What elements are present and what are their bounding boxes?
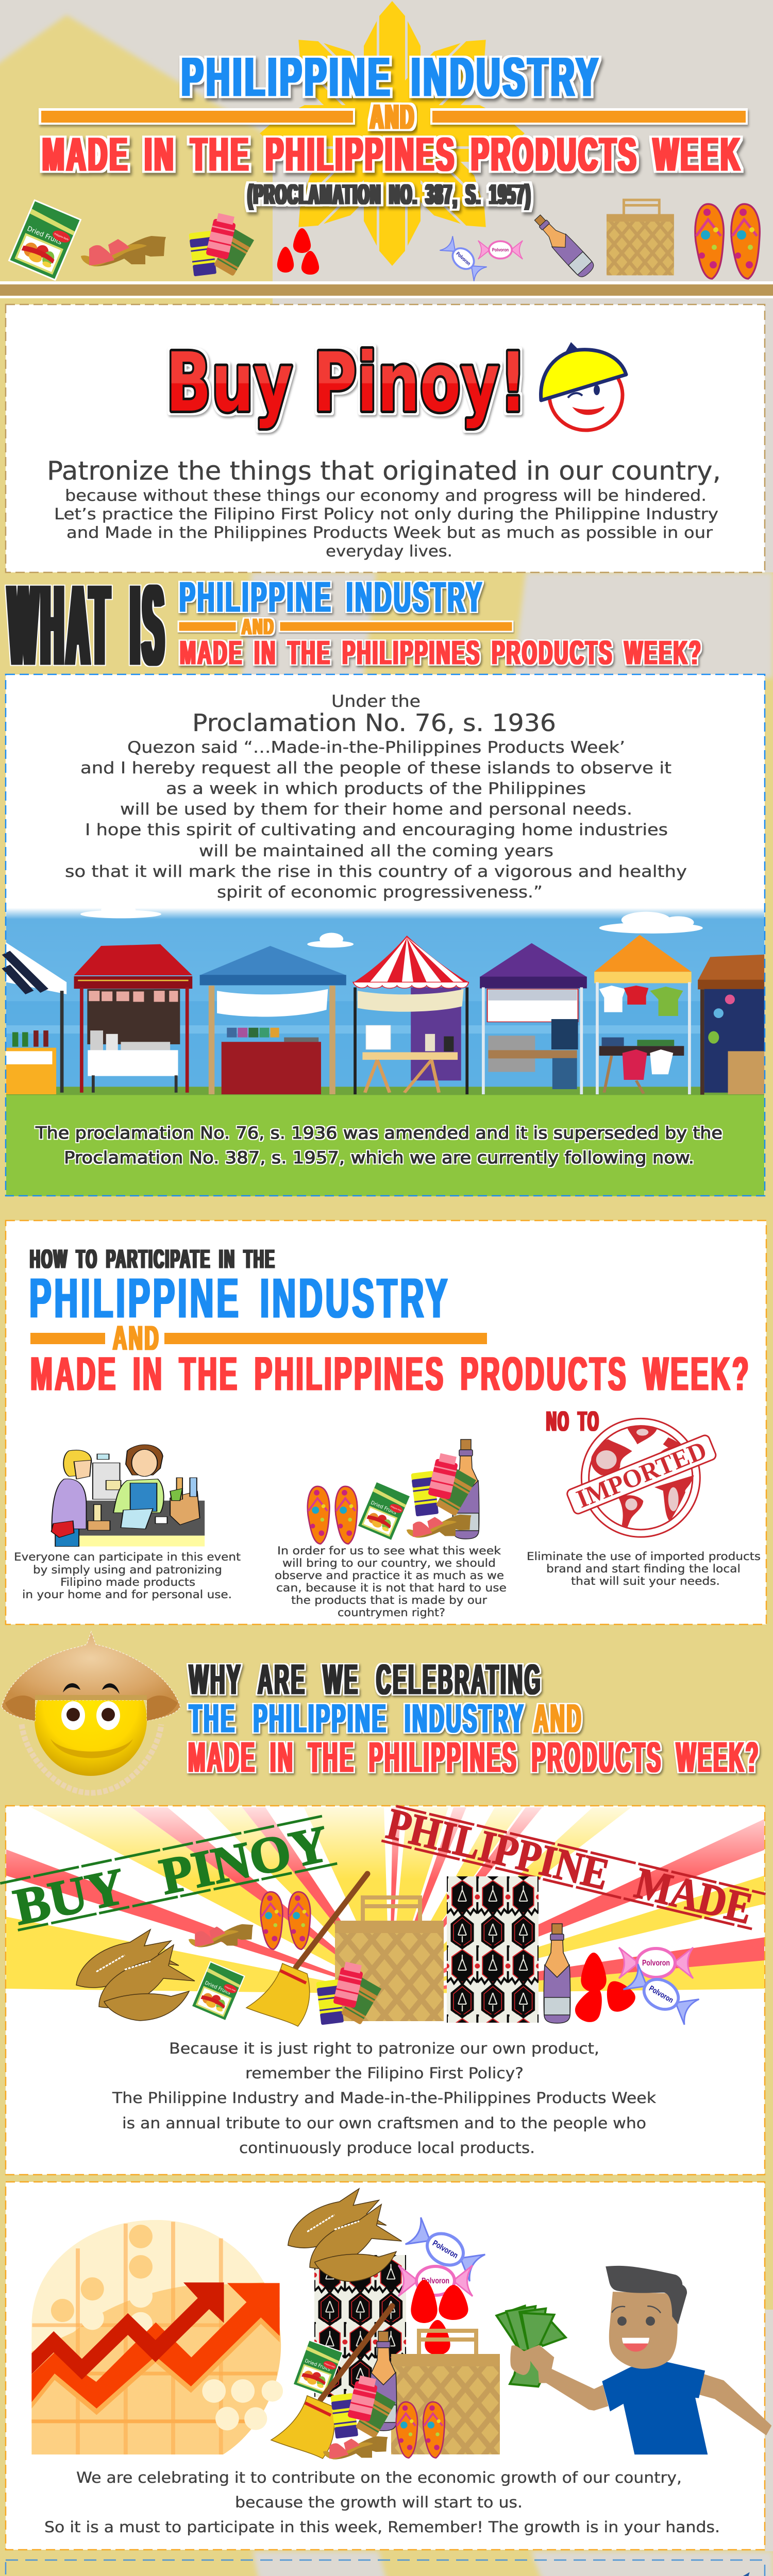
text: column 3: Eliminate the use of imported products: [527, 1550, 761, 1563]
text: patronize body: and Made in the Philippines Products Week but as much as possible in our: [66, 524, 713, 542]
heading word: and: AND: [242, 614, 275, 639]
heading line: Philippine Industry: PHILIPPINE INDUSTRY: [179, 573, 484, 621]
heading: how to participate in the: HOW TO PARTICIPATE IN THE: [30, 1244, 276, 1274]
icon: salted eggs: [411, 2280, 468, 2355]
text: column 2: In order for us to see what this week: [277, 1545, 501, 1557]
logo: eagle wing: [588, 2572, 750, 2576]
heading divider bars: [178, 621, 513, 632]
icon: woven fabric: [330, 2375, 396, 2438]
icon: slippers: [261, 1892, 310, 1950]
stall: red: [74, 944, 192, 1093]
icon: textile: [314, 2255, 406, 2397]
panel: proclamation: [6, 674, 765, 1196]
icon: broom: [271, 2306, 392, 2459]
icon: Pinoy face mascot: [541, 342, 626, 430]
text: proclamation amended note: Proclamation No. 387, s. 1957, which we are currently following now.: [64, 1148, 694, 1167]
icon: sandal: [323, 2436, 388, 2460]
title: [39, 46, 748, 210]
icon: woven fabric: [316, 1961, 381, 2025]
icon: textile: [447, 1876, 539, 2023]
text: proclamation quote: will be maintained all the coming years: [199, 842, 553, 860]
text: column 1: [14, 1551, 241, 1601]
icon: woven fabric: [189, 212, 254, 276]
text: patronize lead: Patronize the things that originated in our country,: [47, 456, 721, 486]
icon: basket: [335, 1897, 444, 2021]
icon: sandal: [81, 236, 166, 266]
text: proclamation quote: so that it will mark the rise in this country of a vigorous and healthy: [65, 862, 687, 881]
icon: basket: [607, 200, 674, 275]
heading: why are we celebrating: [188, 1655, 760, 1781]
text: proclamation amended note: The proclamation No. 76, s. 1936 was amended and it is superseded by the: [35, 1123, 722, 1143]
stall: red and white tent: [353, 936, 468, 1094]
text: proclamation quote: as a week in which products of the Philippines: [166, 779, 586, 798]
text: column 2: countrymen right?: [338, 1606, 445, 1619]
text: column 2: will bring to our country, we should: [282, 1557, 496, 1569]
text: why celebrate 2: We are celebrating it to contribute on the economic growth of our country,: [76, 2469, 682, 2486]
icon: polvoron candies: [398, 2217, 485, 2296]
heading: no to: NO TO: [546, 1406, 600, 1437]
text: patronize body: because without these things our economy and progress will be hindered.: [65, 487, 707, 505]
title word: and: AND: [370, 97, 415, 137]
icon: sandal: [189, 1924, 253, 1947]
heading: what is: WHAT IS: [9, 562, 167, 689]
panel: why celebrate 1: [0, 1798, 768, 2175]
icon: products group: [308, 1439, 479, 1544]
heading word: and: AND: [113, 1319, 160, 1358]
stall: orange with clothes: [594, 935, 692, 1094]
panel: buy pinoy: [6, 304, 765, 572]
text: column 3: brand and start finding the local: [546, 1563, 741, 1575]
text: why celebrate 2: because the growth will start to us.: [235, 2494, 523, 2511]
text: column 2: the products that is made by our: [291, 1594, 487, 1606]
text: column 2: observe and practice it as much as we: [275, 1569, 504, 1582]
icon: polvoron candies: [619, 1947, 699, 2025]
products pile: [271, 2189, 500, 2460]
text: proclamation quote: spirit of economic progressiveness.”: [217, 883, 543, 902]
text: proclamation quote: [65, 691, 687, 902]
icon: smiley with native hat: [2, 1632, 180, 1793]
text: why celebrate 1: is an annual tribute to our own craftsmen and to the people who: [122, 2114, 646, 2132]
icon: bottle: [544, 1924, 570, 2023]
icon: dried fruits: [292, 2340, 344, 2397]
icon: bottle: [530, 211, 596, 280]
text: column 3: [527, 1550, 761, 1587]
icon: salted eggs: [572, 1953, 639, 2026]
heading divider bars: [30, 1333, 487, 1344]
stall: striped awning: [6, 942, 66, 1094]
icon: slippers: [695, 204, 760, 279]
icon: dried fish: [288, 2189, 402, 2282]
text: why celebrate 2: [44, 2469, 720, 2536]
text: proclamation quote: Proclamation No. 76, s. 1936: [192, 709, 556, 737]
illustration: cashier and shopper: [52, 1445, 205, 1547]
title divider bars: [39, 108, 748, 125]
icon: salted eggs: [277, 228, 319, 275]
icon: Philippine sun: [260, 1, 525, 266]
icon: basket: [391, 2331, 500, 2454]
text: proclamation quote: I hope this spirit of cultivating and encouraging home industries: [85, 821, 668, 839]
icon: imported stamp: [565, 1418, 718, 1537]
header product row: [8, 199, 760, 281]
text: proclamation quote: will be used by them for their home and personal needs.: [120, 800, 632, 819]
text: column 2: can, because it is not that hard to use: [276, 1582, 507, 1594]
icon: bottle: [370, 2331, 397, 2431]
stamp: buy pinoy: BUY PINOY: [9, 1815, 333, 1936]
panel: how to participate: [6, 1221, 766, 1624]
text: proclamation quote: Quezon said “…Made-in-the-Philippines Products Week’: [127, 738, 625, 757]
text: column 1: in your home and for personal use.: [22, 1588, 232, 1601]
text: proclamation amended note: [35, 1123, 722, 1167]
stall: brown: [698, 955, 764, 1095]
text: why celebrate 1: Because it is just right to patronize our own product,: [169, 2040, 599, 2057]
text: why celebrate 1: continuously produce local products.: [239, 2139, 535, 2157]
text: patronize body: [54, 487, 718, 561]
text: column 1: Everyone can participate in this event: [14, 1551, 241, 1563]
chart: growth arrows: [31, 2220, 283, 2454]
text: column 2: [275, 1545, 507, 1619]
icon: dried fruits pack: [8, 199, 81, 281]
text: why celebrate 2: So it is a must to participate in this week, Remember! The growth is in your hands.: [44, 2518, 720, 2536]
text: patronize body: everyday lives.: [326, 543, 452, 561]
icon: imported stamp: IMPORTED: [573, 1435, 711, 1514]
icon: dried fruits: [191, 1961, 245, 2022]
text: proclamation quote: Under the: [331, 691, 421, 711]
text: why celebrate 1: [112, 2040, 656, 2157]
panel: why celebrate 2: [6, 2182, 771, 2550]
clouds: [80, 905, 703, 947]
products group: [76, 1874, 699, 2026]
heading: Philippine Industry: PHILIPPINE INDUSTRY: [29, 1267, 450, 1330]
divider band: [0, 281, 773, 298]
illustration: man holding money: [496, 2266, 771, 2454]
stall: purple: [480, 943, 587, 1094]
stall: blue: [200, 946, 346, 1094]
text: why celebrate 1: The Philippine Industry and Made-in-the-Philippines Products Week: [112, 2089, 656, 2107]
panel: sources and logo: [6, 2560, 765, 2576]
heading: Buy Pinoy: Buy Pinoy!: [166, 335, 527, 430]
sunburst rays: [5, 1807, 768, 1994]
icon: dried fish: [76, 1929, 195, 2021]
icon: broom: [246, 1874, 367, 2026]
icon: polvoron candies: [440, 236, 523, 281]
text: why celebrate 1: remember the Filipino First Policy?: [245, 2064, 524, 2082]
icon: slippers: [396, 2402, 445, 2458]
text: patronize body: Let’s practice the Filipino First Policy not only during the Philippine Industry: [54, 505, 718, 523]
illustration: market stalls: [6, 905, 764, 1196]
text: column 1: by simply using and patronizing: [33, 1564, 222, 1576]
text: column 3: that will suit your needs.: [571, 1575, 720, 1587]
text: proclamation quote: and I hereby request all the people of these islands to observe it: [80, 759, 671, 777]
heading: why are we celebrating: AND: [534, 1696, 583, 1741]
text: column 1: Filipino made products: [60, 1576, 195, 1588]
